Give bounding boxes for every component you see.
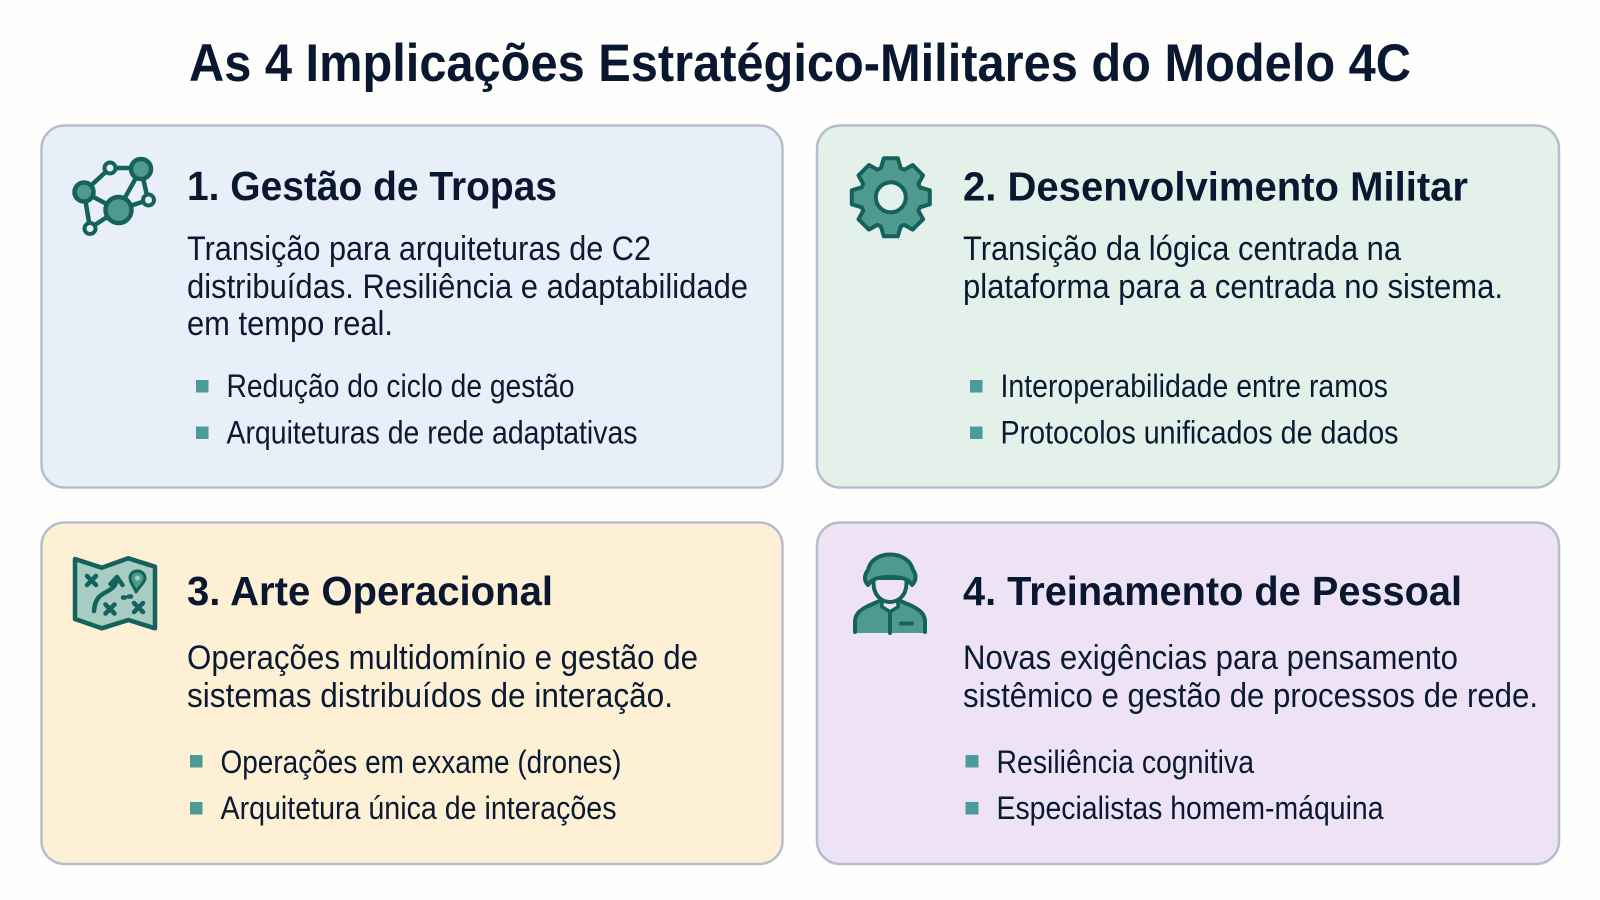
icon: soldier (855, 554, 925, 633)
body text: em tempo real. (187, 305, 393, 343)
heading: 1. Gestão de Tropas (187, 163, 557, 209)
title: As 4 Implicações Estratégico-Militares do Modelo 4C (189, 34, 1411, 93)
body text: Operações multidomínio e gestão de (187, 639, 698, 677)
body text: sistêmico e gestão de processos de rede. (963, 677, 1538, 715)
body text: Transição para arquiteturas de C2 (187, 230, 651, 268)
icon: network (74, 159, 154, 234)
body text: distribuídas. Resiliência e adaptabilidade (187, 268, 748, 306)
bullet: interoperabilidade: Interoperabilidade entre ramos (1000, 368, 1388, 404)
body text (963, 230, 1503, 306)
icon: tactical map (75, 558, 155, 628)
heading: 3. Arte Operacional (187, 568, 553, 614)
body text: Transição da lógica centrada na (963, 230, 1401, 268)
bullet: especialistas: Especialistas homem-máquina (996, 790, 1384, 826)
panel: 4. Treinamento de Pessoal (817, 522, 1559, 864)
bullet: resiliência: Resiliência cognitiva (996, 744, 1254, 780)
body text (187, 230, 748, 343)
body text (187, 639, 698, 715)
heading: 2. Desenvolvimento Militar (963, 164, 1468, 210)
panel: 2. Desenvolvimento Militar (817, 126, 1559, 488)
panel: 3. Arte Operacional (42, 522, 782, 864)
bullet: arquitetura única: Arquitetura única de interações (220, 790, 616, 826)
heading: 4. Treinamento de Pessoal (963, 568, 1462, 614)
panel: 1. Gestão de Tropas (42, 126, 782, 488)
bullet: protocolos: Protocolos unificados de dados (1000, 414, 1398, 450)
bullet: ciclo de gestão: Redução do ciclo de gestão (226, 368, 574, 404)
bullet: arquiteturas de rede: Arquiteturas de rede adaptativas (226, 414, 638, 450)
icon: gear (852, 158, 930, 236)
body text (963, 639, 1538, 715)
body text: Novas exigências para pensamento (963, 639, 1458, 677)
body text: sistemas distribuídos de interação. (187, 677, 673, 715)
body text: plataforma para a centrada no sistema. (963, 268, 1503, 306)
bullet: exxame: Operações em exxame (drones) (220, 744, 622, 780)
